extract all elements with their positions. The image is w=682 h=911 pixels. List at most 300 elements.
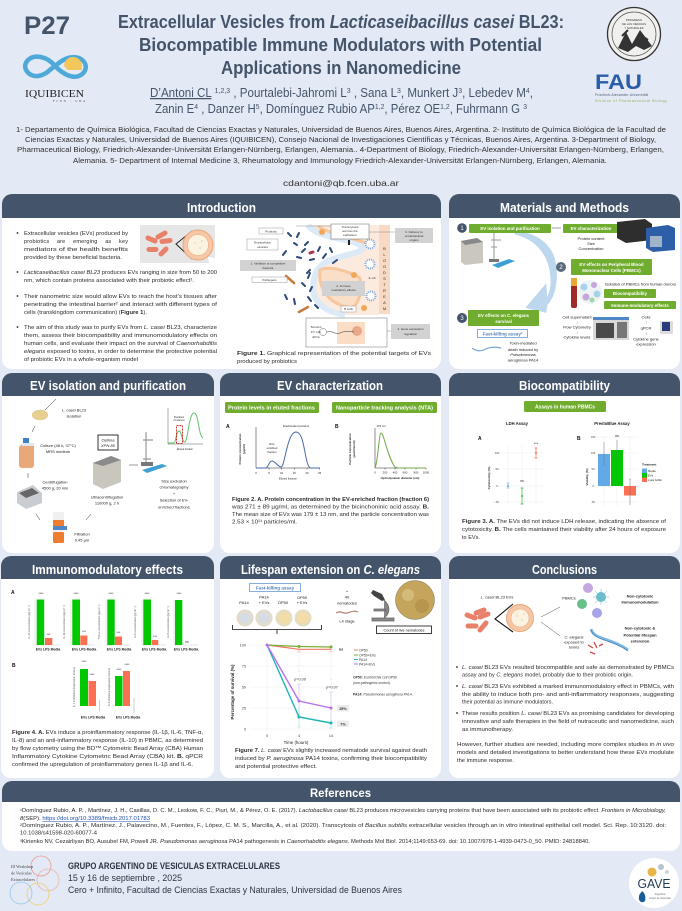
workflow: isolation steps: Centrifugation bbox=[43, 480, 67, 484]
assay setup: plates: PA14 bbox=[259, 594, 270, 600]
step 2: EV effects on PBMCs: qPCR bbox=[641, 326, 651, 330]
chart A: protein concentration: (µg/ml) bbox=[242, 444, 246, 454]
introduction bullets: human cells, and evaluate their impact on the survival of Caenorhabditis bbox=[24, 341, 217, 347]
label: protein levels: Protein levels in eluted fractions bbox=[228, 406, 315, 412]
conclusions text: the immune response. bbox=[457, 758, 514, 764]
panel: EV characterization bbox=[220, 373, 441, 553]
chart A: protein concentration: A bbox=[226, 424, 230, 430]
step 3: EV effects on C. elegans survival: 3 bbox=[460, 316, 464, 322]
survival line chart: (non-pathogenic control). bbox=[353, 681, 391, 685]
step 2: EV effects on PBMCs: EV effects on Peripheral Blood bbox=[579, 262, 644, 267]
workflow: isolation steps bbox=[17, 399, 203, 543]
figure 1: diagram of EV targets: regulation bbox=[404, 332, 417, 336]
chart B: NTA size distribution: 1000 bbox=[423, 470, 430, 474]
chart A: cytokine concentrations: EVs LPS Media bbox=[72, 648, 96, 652]
panel: Biocompatibility: Biocompatibility bbox=[519, 378, 611, 393]
workflow: isolation steps: Optima bbox=[102, 438, 115, 442]
chart A: protein concentration: fraction bbox=[267, 450, 277, 454]
authors: 3 bbox=[523, 102, 527, 111]
chart A: protein concentration: 0 bbox=[255, 471, 257, 475]
step 2: EV effects on PBMCs: Cytokine gene bbox=[633, 336, 660, 342]
step 2: EV effects on PBMCs: expression bbox=[636, 342, 656, 346]
chart A: LDH assay: *** bbox=[534, 442, 539, 446]
chromatogram: Fractions bbox=[174, 416, 185, 419]
panel: Immunomodulatory effects bbox=[1, 556, 214, 778]
figure 1 caption: Figure 1. Graphical representation of the potential targets of EVs bbox=[237, 351, 431, 357]
step 3: EV effects on C. elegans survival: aeruginosa PA14 bbox=[508, 358, 539, 362]
arrow: curved blue flow bbox=[515, 233, 555, 311]
chart B: PrestoBlue assay: ns bbox=[615, 434, 619, 438]
step 3: EV effects on C. elegans survival: survival bbox=[495, 319, 512, 324]
step 2: EV effects on PBMCs: Cells bbox=[642, 314, 650, 320]
step 1: EV isolation and purification: 1 bbox=[460, 226, 464, 232]
chart A: protein concentration: 5 bbox=[268, 471, 270, 475]
conclusions diagram: exposed to bbox=[564, 640, 585, 644]
step: EV characterization: Protein content bbox=[578, 236, 605, 241]
panel: Immunomodulatory effects: Immunomodulatory effects bbox=[32, 562, 183, 577]
survival line chart: 4 bbox=[298, 734, 300, 738]
chart B: qPCR gene expression bbox=[12, 660, 140, 720]
reference list: ²Domínguez Rubio, A. P., Martínez, J., Palavecino, M., Fuentes, F., López, C. M. S., Marcilla, A., et al. (2020). Transcytosis of Bacillus subtilis extracellular vesicles through an in vitro intestinal epithelial cell model. Sci. Rep. 10:3120. doi: bbox=[20, 823, 666, 829]
chart A: cytokine concentrations: **** bbox=[145, 592, 150, 596]
chart B: PrestoBlue assay: -50 bbox=[591, 500, 595, 504]
chart A: protein concentration bbox=[226, 424, 322, 480]
survival line chart: . bbox=[330, 677, 332, 681]
survival line chart: 0 bbox=[244, 728, 246, 732]
survival line chart: 25% bbox=[339, 707, 347, 711]
authors: , Pérez OE bbox=[384, 102, 440, 116]
panel: Conclusions bbox=[449, 556, 680, 778]
figure 1: diagram of EV targets: 1. Inhibition of competitive bbox=[251, 262, 286, 266]
step: EV characterization bbox=[552, 219, 675, 252]
step 3: EV effects on C. elegans survival: Fast-killing assay³ bbox=[483, 332, 523, 336]
chart A: protein concentration: 25 bbox=[318, 471, 322, 475]
survival line chart: ns bbox=[339, 648, 343, 652]
chart A: cytokine concentrations: **** bbox=[74, 592, 79, 596]
step 3: EV effects on C. elegans survival: EV effects on C. elegans bbox=[478, 313, 530, 318]
step 2: EV effects on PBMCs: Cell supernatant bbox=[562, 314, 592, 320]
survival line chart: 50 bbox=[242, 686, 246, 690]
survival line chart: Time (hours) bbox=[284, 740, 309, 745]
affiliations: Alemania. 5- Department of Internal Medicine 3, Rheumatology and Immunology Friedrich-Alexander-Universität Erlangen-Nürnberg, Erlangen, Alemania. bbox=[73, 156, 607, 165]
authors bbox=[150, 86, 533, 116]
event details: Cero + Infinito, Facultad de Ciencias Exactas y Naturales, Universidad de Buenos Aires bbox=[68, 885, 402, 896]
chart B: qPCR gene expression: B bbox=[12, 663, 16, 669]
chart A: cytokine concentrations: EVs LPS Media bbox=[107, 648, 131, 652]
figure 4 caption: confirmed the upregulation of proinflammatory genes IL-1β and IL-6. bbox=[12, 762, 193, 768]
chart B: PrestoBlue assay bbox=[577, 421, 662, 506]
figure 1: diagram of EV targets: 2. Immune bbox=[336, 284, 351, 288]
chart B: PrestoBlue assay: 0 bbox=[592, 484, 594, 488]
introduction bullets: penetrating the intestinal barrier² and interact with different types of bbox=[24, 302, 218, 308]
chart A: cytokine concentrations: **** bbox=[39, 592, 44, 596]
chart A: cytokine concentrations: A bbox=[11, 590, 15, 596]
logo: IQUIBICEN bbox=[25, 57, 86, 103]
chart A: protein concentration: enriched bbox=[267, 446, 278, 450]
figure 2 caption: The mean size of EVs was 179 ± 13 nm, and the particle concentration was bbox=[232, 512, 429, 518]
authors: , Sana L bbox=[351, 86, 397, 100]
chart B: PrestoBlue assay: Lysis buffer bbox=[648, 478, 662, 482]
title bbox=[118, 11, 564, 78]
survival line chart: Percentage of survival (%) bbox=[230, 664, 235, 719]
survival line chart: 14 bbox=[329, 734, 333, 738]
title: Extracellular Vesicles from Lacticaseibacillus casei BL23: bbox=[118, 11, 564, 32]
logo: FAU: Friedrich-Alexander-Universität bbox=[595, 93, 648, 97]
workflow: isolation steps: 4500 g, 20 min bbox=[42, 486, 68, 490]
introduction bullets: of probiotic EVs in a whole-organism model bbox=[24, 357, 138, 363]
authors: , Munkert J bbox=[401, 86, 458, 100]
survival line chart: 0 bbox=[266, 734, 268, 738]
assay setup: plates: OP50 bbox=[278, 600, 289, 605]
assay setup: plates: PA14 bbox=[239, 600, 250, 605]
panel: Introduction bbox=[2, 194, 441, 369]
reference list: 10.1038/s41598-020-60077-4 bbox=[20, 830, 97, 836]
reference list: 8(SEP). https://doi.org/10.3389/fmicb.2017.01783 bbox=[20, 816, 150, 822]
conclusions diagram: Non-cytotoxic & bbox=[625, 626, 655, 630]
survival line chart: 25 bbox=[242, 706, 246, 710]
conclusions text: However, further studies are needed, including more complex studies in in vivo bbox=[457, 742, 674, 748]
chart A: cytokine concentrations: IL-8 concentration (pg ml⁻¹) bbox=[166, 606, 170, 638]
survival line chart: 75 bbox=[242, 664, 246, 668]
chart A: LDH assay: ns bbox=[520, 479, 524, 483]
introduction bullets: mediators of the health benefits bbox=[24, 247, 128, 253]
chart A: cytokine concentrations: *** bbox=[82, 630, 87, 634]
logo: university seal bbox=[608, 8, 660, 60]
workflow: isolation steps: + bbox=[173, 491, 176, 496]
email: cdantoni@qb.fcen.uba.ar bbox=[283, 178, 399, 188]
authors: 1,2,3 bbox=[215, 86, 230, 95]
step 2: EV effects on PBMCs: 2 bbox=[559, 265, 563, 271]
chart A: LDH assay: -50 bbox=[495, 500, 499, 504]
icon: probiotic bacteria note bbox=[140, 225, 215, 263]
assay setup: nematodes and counting bbox=[336, 580, 434, 634]
authors: , Danzer H bbox=[198, 102, 256, 116]
figure 1: diagram of EV targets: vesicles bbox=[257, 245, 268, 249]
survival line chart bbox=[230, 642, 413, 745]
logo: FAU: FAU bbox=[595, 71, 642, 94]
step 1: EV isolation and purification bbox=[457, 223, 551, 268]
figure 7 caption: Figure 7. L. casei EVs slightly increased nematode survival against death bbox=[235, 748, 427, 754]
assay setup: nematodes and counting: nematodes bbox=[337, 600, 357, 606]
chart B: NTA size distribution: 800 bbox=[414, 470, 419, 474]
authors: Zanin E bbox=[155, 102, 198, 116]
reference list: ³Kirienko NV, Cezairliyan BO, Ausubel FM, Powell JR. Pseudomonas aeruginosa PA14 pathogenesis in Caenorhabditis elegans. Methods Mol Biol. 2014;1149:653-69. doi: 10.1007/978-1-4939-0473-0_50. PMID: 24818840. bbox=[20, 839, 590, 845]
introduction bullets bbox=[17, 231, 218, 363]
panel: Materials and Methods bbox=[449, 194, 680, 369]
authors: 5 bbox=[256, 102, 260, 111]
label: assays in human PBMCs: Assays in human PBMCs bbox=[535, 404, 595, 410]
chart B: NTA size distribution: 179 nm bbox=[376, 424, 386, 428]
chromatogram: of interest bbox=[174, 419, 185, 422]
figure 4 caption: Figure 4. A. EVs induce a proinflammatory response (IL-1β, IL-6, TNF-α, bbox=[12, 730, 203, 736]
chart B: PrestoBlue assay: 150 bbox=[591, 435, 596, 439]
chart B: qPCR gene expression: IL-6 (Relative Expression Fold-Ξ) bbox=[107, 668, 111, 706]
panel: Materials and Methods: Materials and Methods bbox=[500, 200, 629, 215]
introduction bullets: provided by these beneficial bacteria. bbox=[24, 255, 122, 261]
label: NTA: Nanoparticle tracking analysis (NTA) bbox=[336, 406, 433, 412]
chart A: cytokine concentrations: *** bbox=[47, 633, 51, 637]
chart A: cytokine concentrations: ns bbox=[185, 640, 189, 644]
step 3: EV effects on C. elegans survival: Toxin-mediated bbox=[509, 340, 537, 346]
figure 7 caption bbox=[235, 748, 427, 770]
chart A: LDH assay: LDH Assay bbox=[506, 421, 529, 426]
affiliations: Ciencias Exactas y Naturales, Universidad de Buenos Aires (IQUIBICEN), Consejo Nacional de Investigaciones Científicas y Técnicas, Buenos Aires, Argentina. 3-Department of Biology, bbox=[25, 135, 656, 144]
figure 7 caption: induced by P. aeruginosa PA14 toxins, confirming their biocompatibility bbox=[235, 756, 427, 762]
chart B: NTA size distribution: 600 bbox=[403, 470, 408, 474]
figure 1: diagram of EV targets: D bbox=[383, 270, 386, 275]
figure 1: diagram of EV targets: B bbox=[383, 246, 386, 251]
workflow: isolation steps: Culture (48 h, 37°C) bbox=[40, 443, 76, 448]
chart B: PrestoBlue assay: PrestoBlue Assay bbox=[594, 421, 630, 426]
survival line chart: PA14+EVs bbox=[359, 662, 376, 666]
figure 3 caption: to EVs. bbox=[462, 535, 480, 541]
figure 1: diagram of EV targets: O bbox=[383, 258, 386, 263]
figure 1: diagram of EV targets: bacteria bbox=[263, 266, 274, 270]
conclusions text: These results position L. casei BL23 EVs as promising candidates for developing bbox=[462, 711, 674, 717]
chart A: cytokine concentrations: *** bbox=[117, 631, 121, 635]
survival line chart: PA14: Pseudomonas aeruginosa PA14. bbox=[353, 692, 413, 696]
logo: III Workshop de Vesículas Extracelulares: de Vesículas bbox=[11, 870, 32, 876]
chart B: NTA size distribution: 200 bbox=[383, 470, 388, 474]
authors: D’Antoni CL bbox=[150, 86, 212, 100]
step 2: EV effects on PBMCs: Immune-modulatory effects bbox=[611, 303, 669, 308]
logo: FAU: Division of Pharmaceutical Biology bbox=[595, 99, 667, 103]
figure 1: diagram of EV targets: L bbox=[383, 252, 386, 257]
step 2: EV effects on PBMCs bbox=[556, 259, 676, 346]
chart A: LDH assay: 0 bbox=[496, 484, 498, 488]
affiliations: 1- Departamento de Química Biológica, Facultad de Ciencias Exactas y Naturales, Universidad de Buenos Aires, Buenos Aires, Argentina. 2- Instituto de Química Biológica de la Facultad de bbox=[16, 125, 666, 134]
chart B: PrestoBlue assay: Treatment bbox=[642, 462, 656, 466]
introduction bullets: The aim of this study was to purify EVs from L. casei BL23, characterize bbox=[24, 325, 217, 331]
figure 3 caption: Figure 3. A. The EVs did not induce LDH release, indicating the absence of bbox=[462, 519, 666, 525]
logo: III Workshop de Vesículas Extracelulares bbox=[10, 856, 59, 905]
figure 1: diagram of EV targets bbox=[240, 224, 433, 347]
conclusions diagram bbox=[467, 583, 659, 654]
step 2: EV effects on PBMCs: ↓ bbox=[576, 320, 578, 324]
authors: 3 bbox=[397, 86, 401, 95]
figure 4 caption: by flow cytometry using the BD™ Cytometric Bead Array (CBA) Human bbox=[12, 746, 203, 752]
assay setup: nematodes and counting: 40 bbox=[345, 594, 350, 600]
figure 7 caption: and potential protective effect. bbox=[235, 764, 317, 770]
conclusions text bbox=[456, 665, 674, 764]
survival line chart: OP50 bbox=[359, 648, 368, 652]
chart B: PrestoBlue assay: Viability (%) bbox=[585, 469, 589, 485]
chart A: cytokine concentrations: IL-1β concentration (pg ml⁻¹) bbox=[62, 605, 66, 639]
logo: GAVE: GAVE bbox=[638, 877, 670, 891]
assay setup: plates: Fast-killing assay bbox=[256, 586, 295, 590]
conclusions text: L. casei BL23 EVs resulted biocompatible and safe as demonstrated by PBMCs bbox=[462, 665, 674, 671]
event details: 15 y 16 de septiembre , 2025 bbox=[68, 873, 182, 884]
chart A: LDH assay: A bbox=[478, 436, 482, 442]
survival line chart: p=0.09 bbox=[294, 678, 306, 682]
figure 1: diagram of EV targets: sRNA bbox=[312, 335, 321, 339]
chart B: NTA size distribution: Particle concentration bbox=[348, 433, 352, 465]
authors: , Fuhrmann G bbox=[450, 102, 523, 116]
panel: Lifespan extension on C. elegans: Lifespan extension on C. elegans bbox=[241, 562, 420, 577]
figure 2 caption bbox=[231, 497, 430, 526]
introduction bullets: cells (transkingdom communication) ( Figure 1). bbox=[24, 310, 147, 316]
chart B: PrestoBlue assay: Media bbox=[648, 469, 656, 473]
workflow: isolation steps: 110000 g, 2 h bbox=[95, 500, 119, 506]
panel: EV isolation and purification: EV isolation and purification bbox=[30, 378, 186, 393]
introduction bullets: Extracellular vesicles (EVs) produced by bbox=[24, 231, 128, 237]
survival line chart: 7% bbox=[340, 722, 346, 726]
chart B: qPCR gene expression: IL-1 β (Relative Expression Fold-Ξ) bbox=[72, 667, 76, 707]
conclusions text: the ability to induce both pro- and anti-inflammatory responses, suggesting bbox=[462, 692, 674, 698]
conclusions diagram: Potential lifespan bbox=[623, 632, 657, 638]
chromatogram bbox=[168, 408, 203, 451]
logo: GAVE: Grupo de Vesículas bbox=[649, 897, 672, 900]
step 2: EV effects on PBMCs: ↓ bbox=[645, 330, 647, 336]
title: Applications in Nanomedicine bbox=[221, 57, 461, 78]
workflow: isolation steps: L. casei BL23 bbox=[62, 408, 87, 412]
chart A: LDH assay: 100 bbox=[495, 451, 500, 455]
chart A: cytokine concentrations: *** bbox=[153, 635, 158, 639]
chromatogram: Eluted fraction bbox=[177, 448, 194, 451]
reference list bbox=[20, 808, 666, 845]
figure 2 caption: was 271 ± 89 µg/ml, as determined by the bicinchoninic acid assay. B. bbox=[231, 504, 430, 510]
figure 1: diagram of EV targets: Probiotic bbox=[265, 230, 277, 234]
conclusions diagram: PBMCs bbox=[562, 596, 576, 600]
introduction bullets: Lacticaseibacillus casei BL23 produces EVs ranging in size from 50 to 200 bbox=[24, 270, 217, 276]
title: Biocompatible Immune Modulators with Potential bbox=[139, 34, 542, 55]
figure 1: diagram of EV targets: M bbox=[383, 306, 386, 311]
conclusions diagram: toxins bbox=[569, 644, 579, 650]
introduction bullets: elegans exposed to toxins, in order to determine the protective potential bbox=[24, 349, 217, 355]
chart A: LDH assay: Cytotoxicity (%) bbox=[487, 467, 491, 489]
chart A: cytokine concentrations: TNF-α concentration (pg ml⁻¹) bbox=[97, 605, 101, 639]
chart A: LDH assay: 50 bbox=[495, 467, 499, 471]
conclusions text: as immunotherapy. bbox=[462, 727, 513, 733]
logo: GAVE bbox=[629, 858, 679, 908]
logo: GAVE: Argentina bbox=[655, 893, 666, 896]
label: NTA bbox=[332, 402, 437, 413]
figure 1: diagram of EV targets: Bacterial bbox=[311, 325, 322, 329]
chart A: cytokine concentrations: IL-10 concentration (pg ml⁻¹) bbox=[27, 605, 31, 639]
conclusions text: innovative and safe therapies in the field of nutraceutic and nanomedicine, such bbox=[462, 719, 674, 725]
assay setup: plates: + EVs bbox=[297, 600, 307, 605]
figure 1: diagram of EV targets: S bbox=[383, 276, 386, 281]
figure 1: diagram of EV targets: Extracellular bbox=[254, 240, 271, 244]
step 3: EV effects on C. elegans survival bbox=[457, 310, 539, 362]
figure 1: diagram of EV targets: accross the bbox=[342, 229, 358, 233]
chart A: protein concentration: Fractionated proteins bbox=[283, 424, 310, 428]
authors: , Domínguez Rubio AP bbox=[260, 102, 375, 116]
chart B: PrestoBlue assay: EVs bbox=[648, 474, 654, 478]
chart A: protein concentration: 15 bbox=[293, 471, 296, 475]
figure 2 caption: Figure 2. A. Protein concentration in the EV-enriched fraction (fraction 6) bbox=[232, 497, 429, 503]
label: assays in human PBMCs bbox=[524, 401, 606, 412]
workflow: isolation steps: XPN-80 bbox=[100, 443, 116, 448]
figure 1: diagram of EV targets: 3. Delivery to bbox=[405, 230, 423, 234]
conclusions diagram: Non-cytotoxic bbox=[627, 594, 654, 598]
figure 1: diagram of EV targets: EV with bbox=[311, 330, 322, 334]
step 2: EV effects on PBMCs: Isolation of PBMCs from human donors bbox=[605, 282, 676, 286]
conclusions text: assay and by C. elegans model, probably due to their probiotic origin. bbox=[462, 672, 633, 678]
chart B: NTA size distribution: Hydrodynamic diameter (nm) bbox=[381, 476, 419, 480]
figure 3 caption: cytotoxicity. B. The cells maintained their viability after 24 hours of exposure bbox=[462, 527, 666, 533]
survival line chart: OP50+EVs bbox=[359, 654, 376, 658]
figure 4 caption: IL-8) and an anti-inflammatory response (IL-10) in PBMC, as determined bbox=[12, 738, 203, 744]
chart B: NTA size distribution bbox=[335, 424, 430, 480]
conclusions diagram: Immunomodulation bbox=[621, 600, 659, 604]
logo: university seal: DE LAS CIENCIAS bbox=[622, 22, 646, 26]
chart A: cytokine concentrations: **** bbox=[109, 592, 114, 596]
chart B: qPCR gene expression: **** bbox=[82, 660, 87, 664]
figure 1: diagram of EV targets: Pathogens bbox=[262, 278, 277, 282]
chart A: protein concentration: Protein concentration bbox=[238, 433, 242, 465]
panel: Lifespan extension on C. elegans bbox=[220, 556, 441, 778]
authors: , bbox=[530, 86, 533, 100]
figure 2 caption: 2.53 × 10¹¹ particles/ml. bbox=[232, 520, 297, 526]
authors: 1,2 bbox=[440, 102, 450, 111]
figure 1: diagram of EV targets: R bbox=[383, 288, 386, 293]
assay setup: plates: + EVs bbox=[259, 600, 269, 605]
introduction bullets: Their nanometric size would allow EVs to reach the host's tissues after bbox=[24, 294, 217, 300]
figure 4 caption bbox=[12, 730, 203, 768]
panel: Biocompatibility bbox=[449, 373, 680, 553]
panel: EV characterization: EV characterization bbox=[277, 378, 383, 393]
figure 1: diagram of EV targets: O bbox=[383, 264, 386, 269]
authors: 3 bbox=[458, 86, 462, 95]
assay setup: plates bbox=[232, 584, 322, 634]
step 3: EV effects on C. elegans survival: Pseudomonas bbox=[510, 352, 536, 357]
event details bbox=[68, 861, 402, 896]
assay setup: nematodes and counting: Count of live nematodes bbox=[384, 628, 425, 632]
chart B: NTA size distribution: (particle/ml) bbox=[352, 440, 356, 458]
event details: GRUPO ARGENTINO DE VESICULAS EXTRACELULARES bbox=[68, 861, 280, 872]
workflow: isolation steps: Selection of EV- bbox=[160, 498, 189, 502]
step 2: EV effects on PBMCs: Flow Cytometry bbox=[563, 324, 591, 330]
survival line chart: PA14 bbox=[359, 658, 367, 662]
authors: , Lebedev M bbox=[462, 86, 526, 100]
step: EV characterization: Size bbox=[587, 241, 596, 246]
figure 3 caption bbox=[462, 519, 666, 541]
chart B: qPCR gene expression: EVs LPS Media bbox=[81, 716, 105, 720]
chart A: cytokine concentrations: EVs LPS Media bbox=[36, 648, 60, 652]
chart B: qPCR gene expression: **** bbox=[90, 673, 95, 677]
chart B: PrestoBlue assay: 100 bbox=[591, 451, 596, 455]
logo: III Workshop de Vesículas Extracelulares: Extracelulares bbox=[11, 877, 35, 882]
poster id: P27: P27 bbox=[24, 12, 70, 40]
step 2: EV effects on PBMCs: ↓ bbox=[645, 320, 647, 324]
chart A: cytokine concentrations: **** bbox=[177, 592, 182, 596]
step 2: EV effects on PBMCs: Mononuclear Cells (PBMCs) bbox=[582, 268, 641, 273]
workflow: isolation steps: isolation bbox=[67, 414, 81, 418]
step 3: EV effects on C. elegans survival: death induced by bbox=[508, 347, 538, 352]
step: EV characterization: Concentration bbox=[579, 246, 603, 251]
figure 1 caption bbox=[237, 351, 431, 365]
chart A: LDH assay bbox=[478, 421, 545, 505]
workflow: isolation steps: Filtration bbox=[74, 532, 90, 536]
chart B: qPCR gene expression: **** bbox=[125, 663, 130, 667]
assay setup: nematodes and counting: + bbox=[346, 588, 349, 594]
survival line chart: OP50: Escherichia coli OP50 bbox=[353, 676, 397, 680]
figure 1: diagram of EV targets: organs bbox=[409, 238, 419, 242]
logo: IQUIBICEN: FCEN - UBA bbox=[53, 99, 86, 103]
figure 1: diagram of EV targets: Transcytosis bbox=[342, 225, 359, 229]
logo: III Workshop de Vesículas Extracelulares: III Workshop bbox=[11, 864, 33, 869]
introduction bullets: them, assess their biocompatibility and immunomodulatory effects on bbox=[24, 333, 217, 339]
workflow: isolation steps: enriched fractions bbox=[158, 504, 190, 510]
conclusions diagram: extension bbox=[631, 638, 650, 644]
survival line chart: p=0.07 bbox=[326, 686, 338, 690]
assay setup: plates: OP50 bbox=[297, 595, 308, 600]
logo: IQUIBICEN: IQUIBICEN bbox=[25, 89, 84, 100]
figure 1: diagram of EV targets: 4. Gene expression bbox=[397, 327, 424, 331]
chart B: PrestoBlue assay: 50 bbox=[591, 467, 595, 471]
figure 1: diagram of EV targets: A bbox=[383, 300, 386, 305]
